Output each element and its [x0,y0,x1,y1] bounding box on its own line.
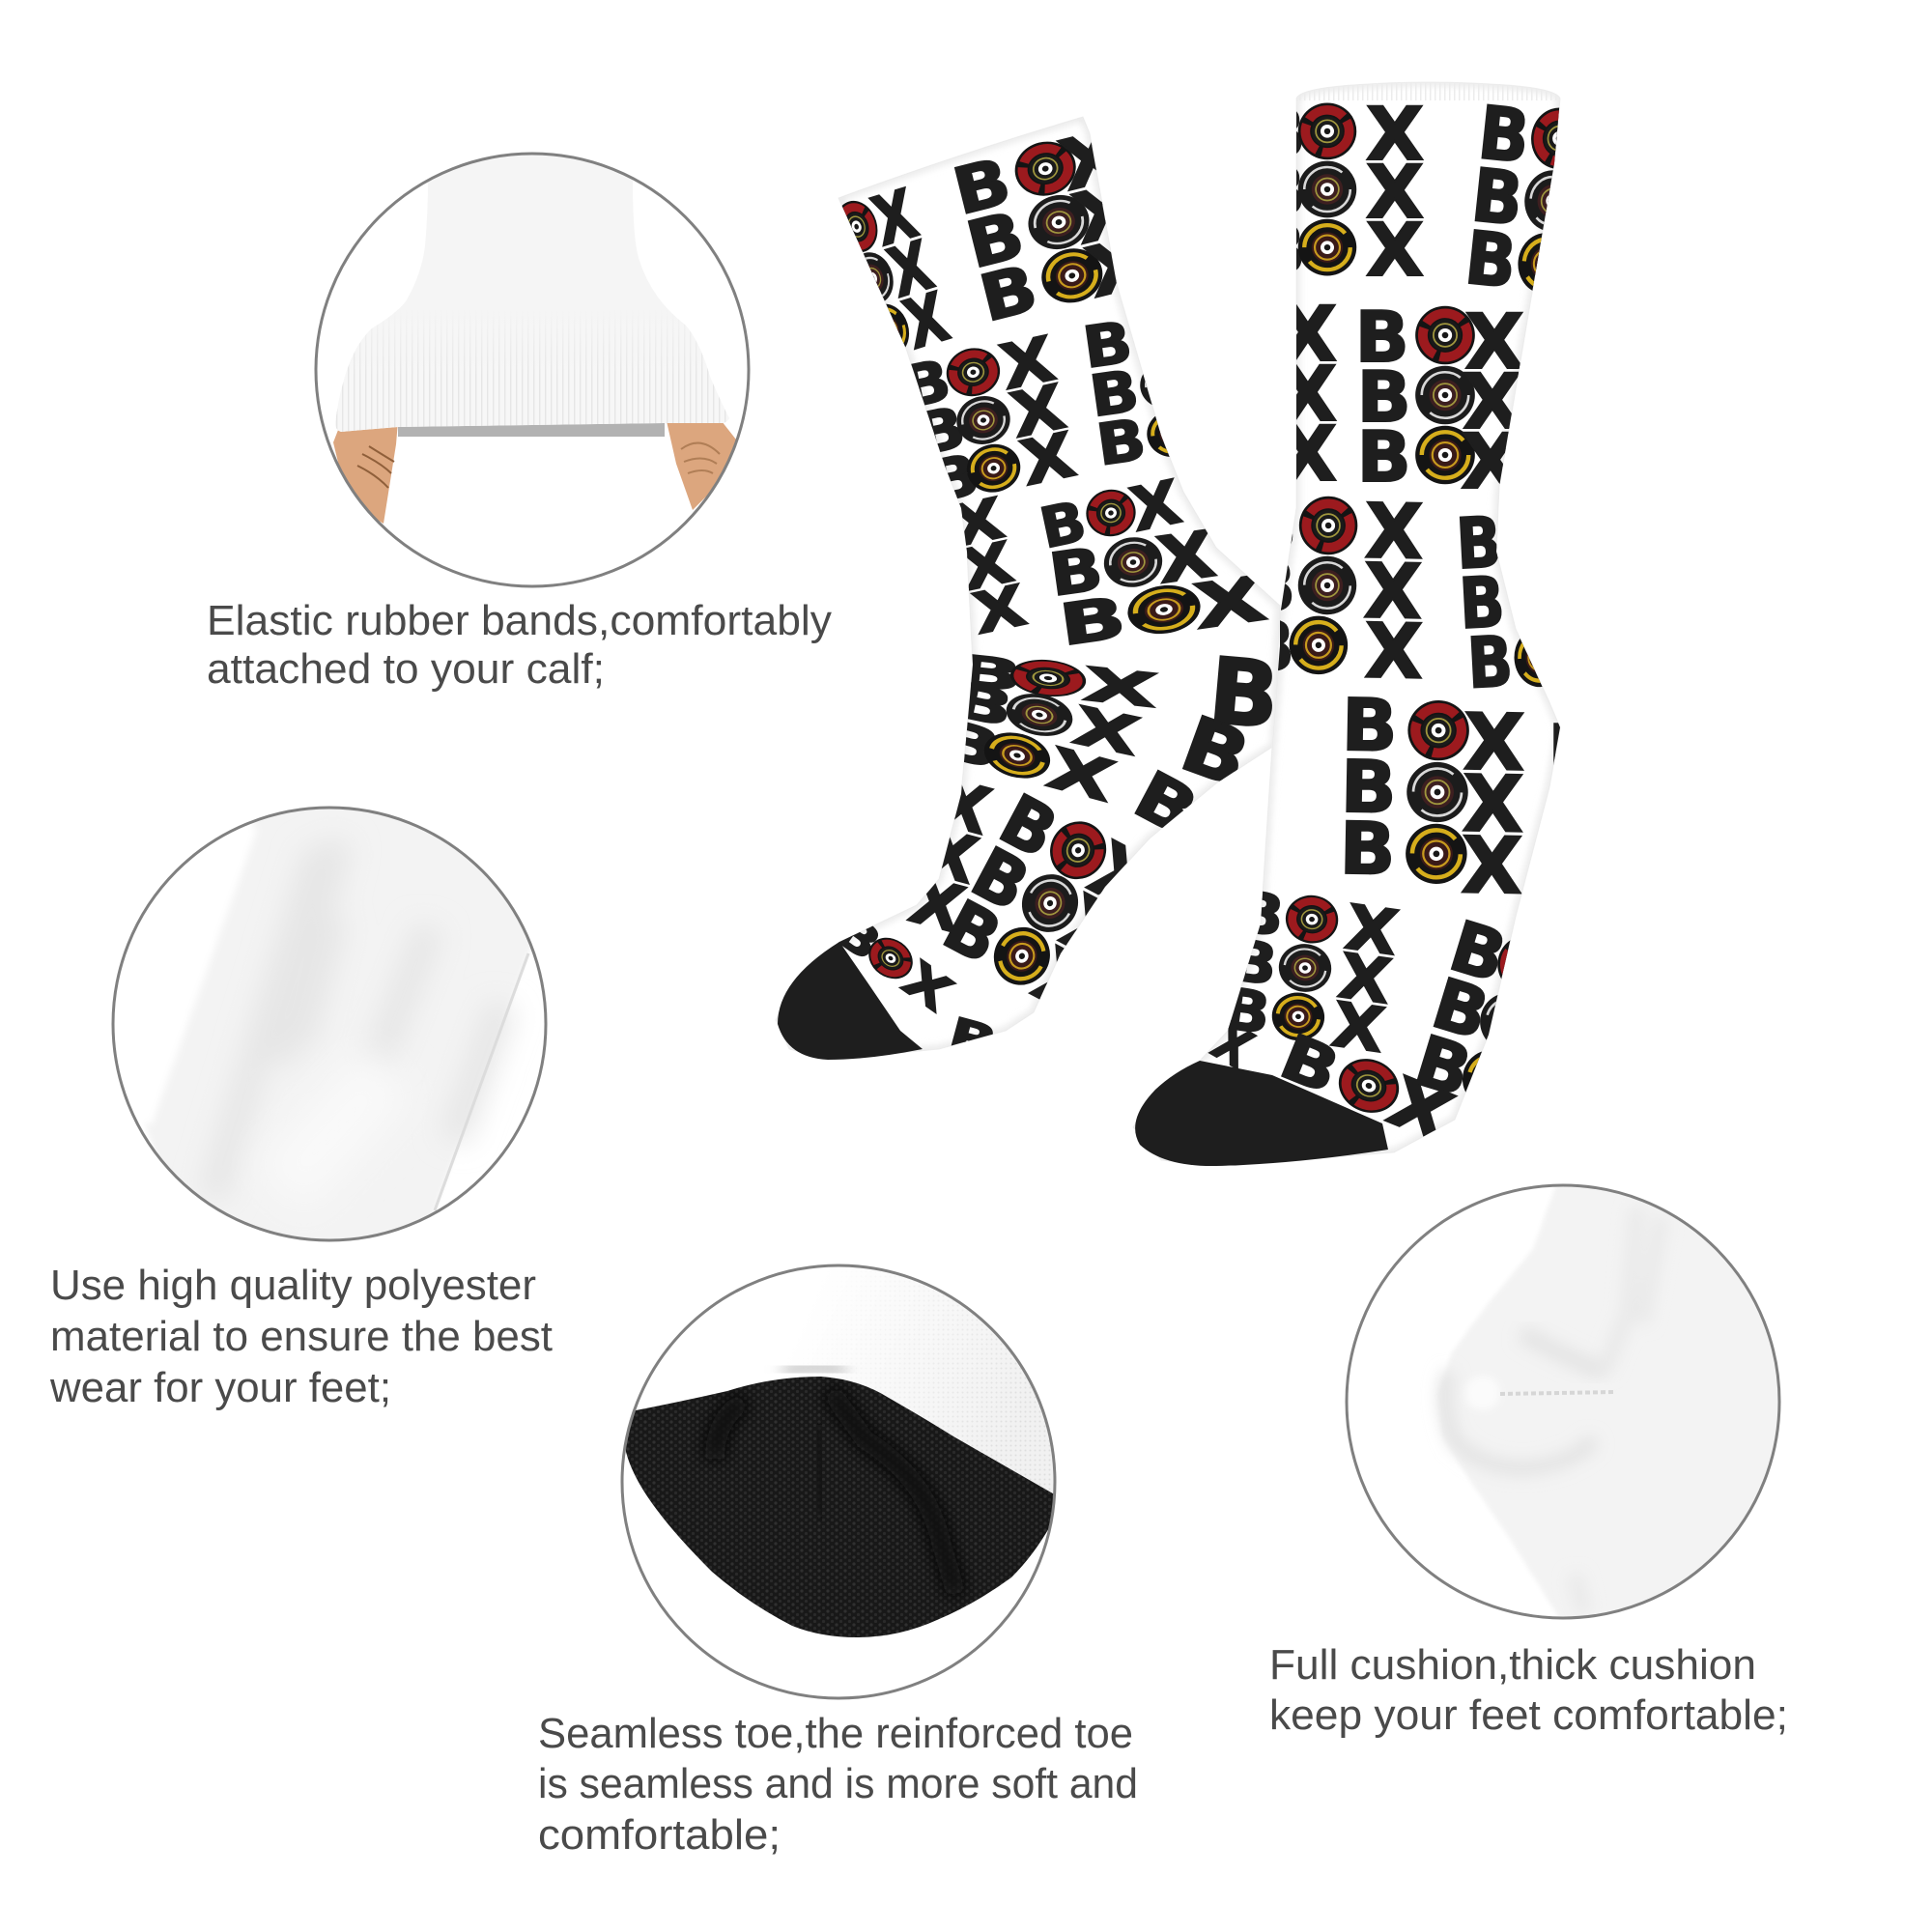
sock pattern: left sock heel block row 2: B [947,670,1018,739]
sock pattern: right sock large block: X [1461,821,1523,912]
text block: polyester [49,1262,553,1411]
text block: elastic rubber bands [207,597,832,693]
icon: left finger [333,421,398,524]
panel: elastic cuff detail circle [316,145,749,586]
sock pattern: right sock large block: B [1340,745,1397,830]
sock pattern: left sock foot block: B [987,779,1069,874]
sock pattern: right sock heel partial block: B [1454,501,1503,584]
text block: full cushion [1269,1641,1788,1739]
sock pattern: left sock heel block row 1: B [952,645,1025,702]
left sock [776,115,1283,1073]
text block: elastic rubber bands: attached to your calf; [207,645,605,693]
sock pattern: left sock top blocks [842,185,952,350]
sock pattern: left sock toe row: B [826,904,891,972]
sock pattern: right sock central block: B [1355,298,1409,379]
sock pattern: right sock large block: X [1462,759,1524,850]
sock pattern: left sock foot block: X [1048,877,1138,981]
sock pattern: left sock partial X foot column [906,784,995,932]
sock pattern: left sock partial X foot column: X [928,765,998,850]
sock pattern: left sock block 2: B [973,250,1044,336]
sock pattern: right sock top right block: B [1462,214,1520,304]
sock pattern: right sock top block: B [1253,94,1305,173]
sock pattern: right sock central block: B [1357,417,1411,498]
sock pattern: left sock large B column [1134,655,1272,829]
sock pattern: left sock top blocks: B [821,303,878,384]
sock pattern: left sock heel block row 2 [968,682,1143,757]
sock pattern: left sock foot block: B [959,832,1041,927]
text block: polyester: material to ensure the best [50,1313,553,1360]
grey inner band of cuff [398,423,665,437]
sock pattern: right sock top right block: B [1468,153,1527,242]
sock pattern: left sock large B column: B [1122,756,1209,852]
sock pattern: right sock large block: B [1339,806,1396,892]
sock pattern: right sock left X column: X [1279,292,1337,379]
sock pattern: left sock heel block row 3 [964,723,1119,804]
sock pattern: right sock outer foot block [1417,920,1511,1093]
sock pattern: right sock edge B: B [1548,710,1601,791]
sock pattern: left sock partial X column [959,495,1030,636]
sock pattern: left sock block 2: B [959,197,1032,283]
text block: polyester: wear for your feet; [49,1364,391,1411]
sock pattern: left sock block 2: B [946,144,1018,230]
sock pattern: left sock block 3: X [1014,419,1082,500]
text block: seamless toe: is seamless and is more soft and [538,1760,1138,1807]
sock pattern: left sock partial X column: X [967,573,1032,648]
sock pattern: right sock outer foot block: B [1441,905,1516,998]
sock pattern: right sock outer foot block: B [1424,962,1498,1056]
sock pattern: left sock block 3: B [910,394,971,469]
sock pattern: right sock top block: B [1253,152,1305,231]
panel: seamless toe detail circle [618,1256,1063,1698]
sock pattern: left sock ankle block row 1: B [1035,490,1092,562]
sock pattern: left sock block 4: B [1093,406,1150,478]
sock pattern: right sock heel partial block [1459,516,1543,688]
sock pattern: right sock foot block: X [1334,940,1396,1018]
sock pattern: right sock toe row: X [1378,1062,1463,1157]
sock pattern: left sock bottom B: B [942,1007,1003,1073]
sock pattern: right sock top block [1296,102,1424,276]
sock pattern: left sock block 3: X [1005,371,1071,453]
sock pattern: right sock ankle block: B [1243,485,1297,567]
sock pattern: right sock ankle block: X [1363,549,1423,637]
sock pattern: right sock central block [1360,305,1524,489]
sock pattern: left sock foot block: X [1020,930,1110,1034]
sock pattern: right sock large block [1345,696,1524,895]
text block: elastic rubber bands: Elastic rubber bands,comfortably [207,597,832,644]
sock pattern: left sock partial X column: X [954,529,1019,605]
sock pattern: left sock ankle block row 3: X [1189,562,1271,643]
sock pattern: right sock large block: X [1463,697,1525,789]
sock pattern: right sock foot block [1229,891,1401,1053]
sock pattern: right sock heel partial block: B [1465,621,1515,704]
sock pattern: left sock heel block row 2: X [1067,695,1146,769]
sock pattern: right sock toe row: B [1270,1020,1350,1108]
sock pattern: right sock foot block: X [1327,988,1389,1066]
sock pattern: right sock toe partial X: X [1202,1010,1263,1081]
text block: seamless toe [538,1710,1138,1859]
sock pattern: left sock block 2: X [1052,115,1131,208]
sock pattern: left sock large B column: B [1170,699,1261,805]
sock pattern: left sock toe row: X [892,951,962,1024]
sock pattern: left sock block 4: B [1086,357,1143,430]
text block: full cushion: Full cushion,thick cushion [1269,1641,1756,1689]
sock pattern: right sock foot block: X [1341,892,1403,970]
sock pattern: right sock ankle block: B [1241,605,1295,687]
sock pattern: right sock ankle block: X [1364,609,1424,696]
sock pattern: left sock ankle block row 2: X [1152,518,1220,599]
sock pattern: right sock large block: B [1341,683,1398,768]
sock pattern: left sock partial X foot column: X [902,864,972,949]
sock pattern: left sock ankle block row 3 [1063,576,1269,645]
sock pattern: right sock left X column [1296,303,1337,481]
sock pattern: left sock block 3 [911,333,1079,498]
left sock toe [778,942,923,1060]
sock pattern: left sock top blocks: X [864,175,925,262]
sock pattern: right sock ankle block: B [1242,545,1296,627]
sock pattern: right sock central block: X [1463,358,1522,446]
sock pattern: left sock top blocks: X [895,277,957,364]
sock pattern: right sock top block: X [1366,93,1424,178]
sock pattern: left sock block 2: X [1065,168,1144,261]
sock pattern: right sock central block: X [1464,298,1524,386]
sock pattern: right sock foot block: B [1218,975,1275,1047]
sock pattern: right sock ankle block: X [1364,489,1424,577]
sock pattern: left sock foot block: B [931,885,1013,980]
sock pattern: left sock top blocks: B [790,200,847,281]
sock pattern: left sock ankle block row 1: X [1124,468,1187,546]
sock pattern: left sock heel block row 1 [970,654,1159,709]
right sock [1133,77,1601,1166]
sock pattern: right sock foot block: B [1232,877,1289,951]
sock pattern: left sock large B column: B [1205,639,1283,750]
sock pattern: right sock top right block [1468,104,1559,291]
sock pattern: left sock ankle block row 2 [1051,529,1219,596]
sock pattern: right sock outer foot block: B [1406,1019,1480,1113]
sock pattern: left sock ankle block row 2: B [1045,534,1107,610]
sock pattern: left sock block 2: X [1079,222,1157,314]
sock pattern: left sock block 4: B [1079,309,1136,382]
sock pattern: right sock top block: B [1253,210,1305,289]
icon: right finger [667,421,736,510]
sock pattern: left sock partial X foot column: X [915,814,985,899]
sock pattern: left sock top blocks: X [880,226,942,313]
sock pattern: left sock foot block: X [1076,825,1167,928]
black reinforced toe [626,1377,1058,1637]
sock pattern: right sock left X column: X [1279,352,1337,439]
sock pattern: left sock heel block row 1: X [1080,656,1161,719]
sock pattern: right sock ankle block [1278,497,1424,679]
sock pattern: right sock top right block: B [1474,90,1533,180]
sock pattern: left sock top blocks: B [806,251,863,332]
sock pattern: left sock block 3: B [895,347,956,422]
panel: polyester fabric detail circle [112,806,547,1242]
sock pattern: left sock heel block row 3: X [1040,734,1122,815]
sock pattern: right sock central block: B [1357,357,1411,439]
sock pattern: right sock top block: X [1366,209,1424,294]
stretched sock cuff [328,145,734,435]
text block: polyester: Use high quality polyester [50,1262,536,1309]
sock pattern: right sock toe row [1281,1034,1459,1137]
sock pattern: left sock heel block row 3: B [932,708,1007,781]
sock pattern: left sock block 2 [954,136,1117,321]
sock pattern: right sock heel partial block: B [1458,561,1507,644]
white fabric above toe [777,1275,1053,1493]
sock pattern: left sock ankle block row 3: B [1055,583,1130,659]
text block: full cushion: keep your feet comfortable; [1269,1691,1788,1739]
sock pattern: right sock central block: X [1461,418,1520,506]
sock pattern: right sock top block: X [1366,151,1424,236]
right sock toe [1135,1061,1388,1166]
sock pattern: right sock foot block: B [1225,925,1282,999]
sock pattern: left sock toe row [838,925,957,1014]
sock pattern: right sock left X column: X [1279,412,1337,498]
sock pattern: left sock partial X column: X [945,486,1010,560]
text block: seamless toe: comfortable; [538,1811,781,1859]
sock pattern: left sock block 3: B [923,441,984,516]
sock pattern: left sock block 4 [1085,322,1170,466]
sock pattern: left sock ankle block row 1 [1041,477,1184,549]
sock pattern: left sock block 3: X [994,324,1062,405]
panel: full cushion detail circle [1347,1179,1797,1633]
text block: seamless toe: Seamless toe,the reinforced toe [538,1710,1133,1757]
sock pattern: left sock foot block [943,792,1127,1000]
